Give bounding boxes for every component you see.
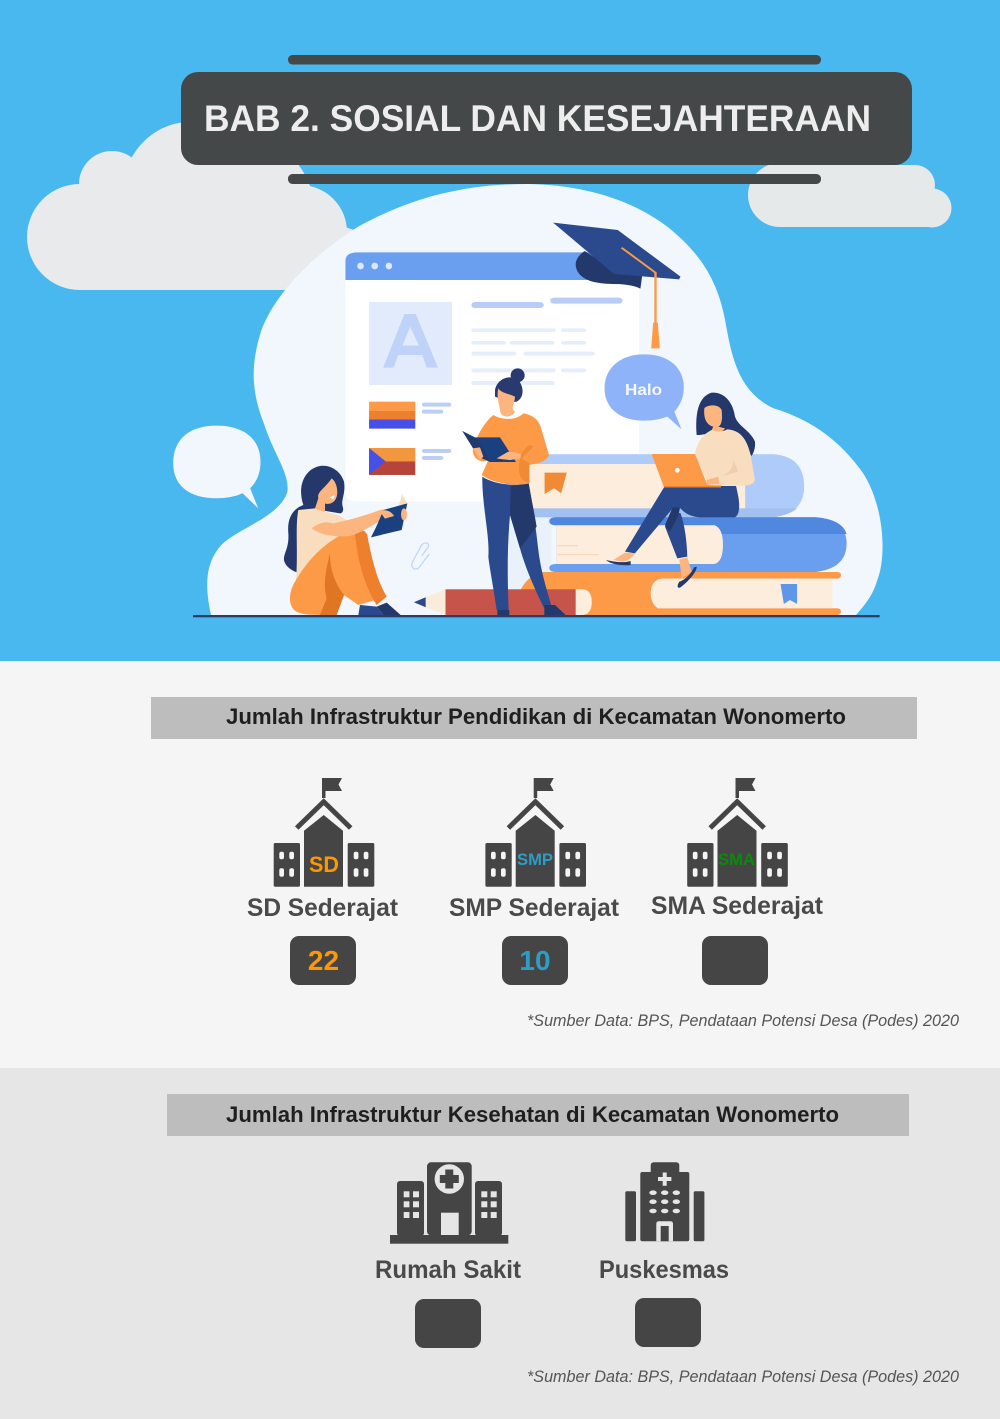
pencil bbox=[414, 589, 592, 615]
heading: health bbox=[167, 1094, 909, 1136]
icon label: SMP: SMP bbox=[517, 850, 553, 869]
source note: health: *Sumber Data: BPS, Pendataan Potensi Desa (Podes) 2020 bbox=[527, 1368, 960, 1386]
panel: education background bbox=[0, 661, 1000, 1068]
value: Rumah Sakit count box bbox=[415, 1299, 481, 1348]
person: woman with laptop on books bbox=[606, 393, 755, 588]
icon label: SMA: SMA bbox=[718, 850, 755, 869]
panel: health background bbox=[0, 1068, 1000, 1419]
speech bubble: empty bbox=[173, 426, 261, 508]
label: SD Sederajat: SD Sederajat bbox=[247, 894, 399, 922]
web page window bbox=[345, 252, 639, 502]
value: SD count: 22 bbox=[308, 945, 339, 976]
value: SMP count bbox=[502, 936, 568, 985]
cloud: left bbox=[27, 122, 372, 290]
title bar: lower rule bbox=[288, 174, 821, 184]
value: SMA count box bbox=[702, 936, 768, 985]
label: SMA Sederajat: SMA Sederajat bbox=[651, 892, 824, 920]
label: Rumah Sakit: Rumah Sakit bbox=[375, 1256, 522, 1284]
cloud: right bbox=[748, 163, 952, 228]
illustration: web page, books and pencil backdrop bbox=[173, 184, 883, 615]
bubble text: Halo bbox=[625, 382, 662, 399]
label: Puskesmas: Puskesmas bbox=[599, 1256, 729, 1284]
person: seated woman reading bbox=[284, 466, 407, 615]
icon label: SD: SD bbox=[309, 852, 339, 877]
icon: SMA school bbox=[687, 778, 788, 887]
paperclip bbox=[412, 543, 429, 569]
value: SMP count: 10 bbox=[519, 945, 551, 976]
soft shade behind books bbox=[490, 502, 552, 615]
title: BAB 2. SOSIAL DAN KESEJAHTERAAN bbox=[204, 98, 871, 139]
heading: health: Jumlah Infrastruktur Kesehatan di Kecamatan Wonomerto bbox=[226, 1102, 839, 1127]
ground line bbox=[193, 615, 880, 617]
title banner bbox=[181, 72, 912, 165]
value: SD count bbox=[290, 936, 356, 985]
icon: SMP school bbox=[485, 778, 586, 887]
person: standing woman with book bbox=[462, 368, 566, 616]
source note: education: *Sumber Data: BPS, Pendataan Potensi Desa (Podes) 2020 bbox=[527, 1012, 960, 1030]
title bar: upper rule bbox=[288, 55, 821, 64]
heading: education: Jumlah Infrastruktur Pendidikan di Kecamatan Wonomerto bbox=[226, 704, 846, 729]
heading: education bbox=[151, 697, 917, 739]
value: Puskesmas count box bbox=[635, 1298, 701, 1347]
book stack bbox=[515, 454, 847, 615]
speech bubble: Halo bbox=[605, 354, 684, 429]
icon: hospital bbox=[390, 1162, 508, 1244]
icon: puskesmas bbox=[625, 1162, 704, 1241]
graduation cap bbox=[553, 223, 681, 348]
panel: hero background bbox=[0, 0, 1000, 661]
label: SMP Sederajat: SMP Sederajat bbox=[449, 894, 620, 922]
blob background bbox=[207, 184, 883, 615]
icon: SD school bbox=[274, 778, 374, 887]
